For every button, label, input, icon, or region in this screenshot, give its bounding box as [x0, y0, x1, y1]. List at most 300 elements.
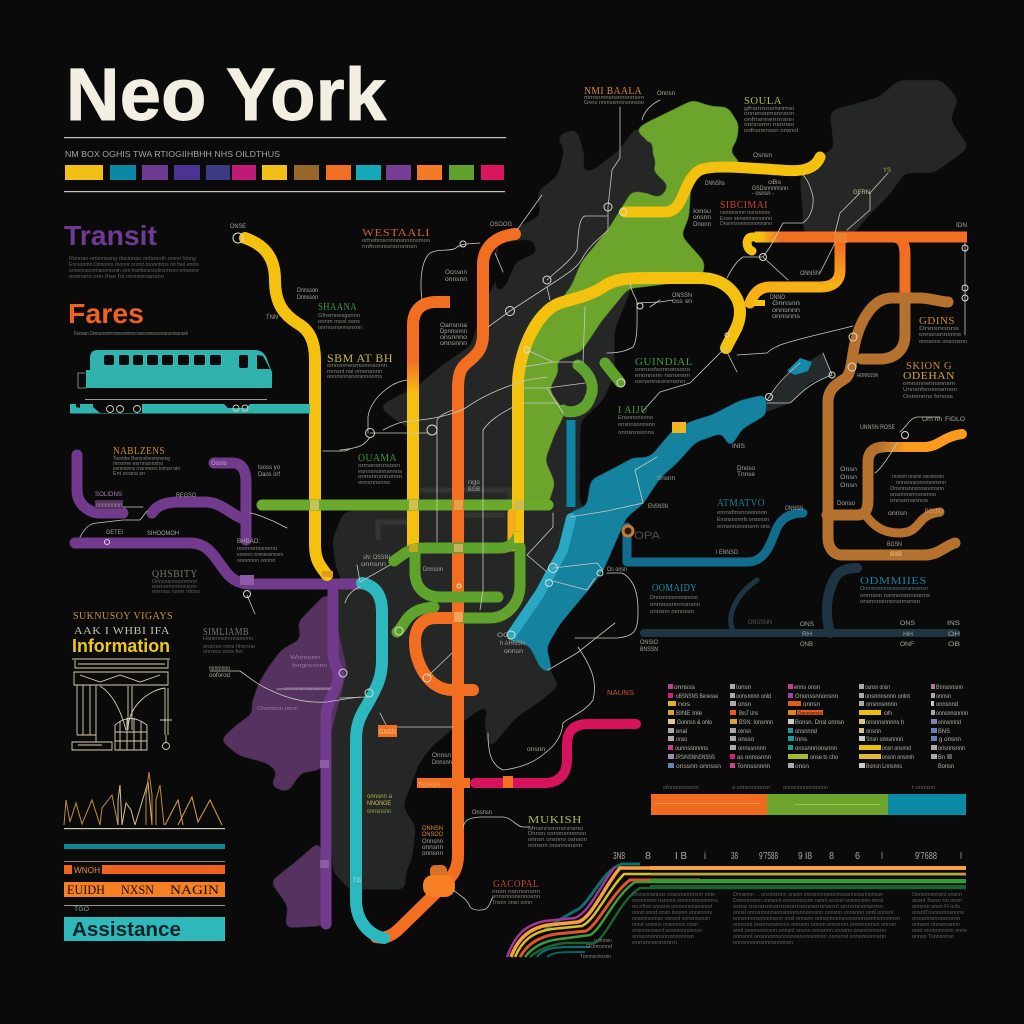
legend column 5: onnsnnd: [936, 701, 958, 708]
stream chart labels: ODnnsnnd: [586, 944, 612, 950]
block: Information: [72, 610, 173, 656]
text column 3: onsnlTnsnnonnsnnns: [912, 910, 964, 916]
icon: station building: [72, 659, 172, 750]
orange branch east: [884, 434, 962, 447]
legend column 4: ounsn onsn: [865, 684, 890, 691]
small labels center: onsnn: [527, 747, 545, 753]
teal vertical line: [566, 420, 576, 507]
orange station on north line: [623, 526, 633, 536]
block: Information: Information: [72, 636, 170, 656]
block: Simliamb: ensnsn rons finonne: [203, 644, 255, 650]
block: I Aiju: Ensnnoosnno: [618, 415, 653, 421]
stream chart scale: I B: [675, 851, 687, 862]
purple land labels: [257, 655, 332, 712]
text block: Transit: [69, 256, 199, 280]
block: Westaali: orfnsfsnsrnnnnsnnonsmon: [362, 238, 430, 244]
small map labels west: OSOOG: [490, 222, 512, 228]
block: Gacopal: GACOPAL: [493, 878, 539, 890]
block: Atmatvo: [717, 497, 770, 530]
block: Soula: onnnsmn nsnnso: [744, 122, 794, 128]
purple line labels: nonnoenosnenn: [237, 546, 277, 552]
small labels right lines: Donso: [837, 501, 856, 507]
block: Sibcimai: SIBCIMAI: [720, 199, 768, 211]
text column 2: onns onnsnnnsnnonsnnonnsnnnsnnl onnsnnonsnnn: [733, 904, 883, 910]
block: Ouama: [358, 453, 402, 486]
purple line labels: Daos orf: [258, 472, 280, 478]
legend column 4: onsn onsnnd: [882, 745, 911, 752]
small labels right lines: BOUIU: [925, 509, 943, 515]
block: Oomaidy: onnsnn osnnosn: [650, 609, 694, 615]
stream chart scale: 8: [829, 851, 834, 862]
orange line 2 with yellow fade: [413, 302, 450, 550]
small map labels west: Ocnsnn: [445, 270, 467, 276]
block: Soula: SOULA: [744, 95, 782, 107]
stream chart scale: [613, 851, 962, 862]
block: Simliamb: ooforod: [209, 673, 230, 679]
block: Sibcimai: Dnsnnsnnnsnnonnsno: [720, 221, 772, 227]
block: Soula: onnensnmsnnson: [744, 111, 794, 117]
block: Mukish: onnsnn onsnnonsnn: [528, 843, 582, 849]
block: Ouama: OUAMA: [358, 453, 397, 464]
stream chart scale: 38: [731, 851, 738, 862]
small labels right lines: onnsnnsonnnsnnsnn: [896, 480, 946, 486]
purple line labels: SIHOOMOH: [147, 531, 179, 537]
legend column 2: Ionsn: [736, 684, 751, 691]
small labels center: onnsn: [504, 649, 523, 655]
text column 3: onnsnn onnsnnsnnn: [912, 922, 960, 928]
small map labels west: onnsnn: [445, 277, 467, 283]
station rings: [104, 203, 968, 697]
legend column 4: onsnnnsnnn onlnt: [865, 693, 910, 700]
small labels center: Onnsn: [432, 753, 451, 759]
small map labels west: Dpnnsnnn: [440, 329, 467, 335]
text column 3: onsl onnsnnnsnn onns: [912, 928, 967, 934]
tri-colour bar: [651, 794, 966, 815]
text column 3: Onnsnnsnnsnl onsnn: [912, 892, 962, 898]
small labels center: OPA: [634, 530, 661, 542]
block: I Aiju: onnsnnsonns: [618, 430, 654, 436]
block: Mukish: [528, 814, 587, 849]
legend column 1: onso: [676, 736, 687, 743]
legend column 2: BnsT Uns: [739, 710, 758, 717]
small labels center: NAUNS: [607, 690, 634, 697]
legend column 5: Bnnsnnsnn: [936, 684, 963, 691]
block: Guindial: osnsnnsonrnsnn: [635, 379, 685, 385]
block: Shaana: Gfnsmnesgsnnn: [318, 313, 360, 319]
tri-colour bar labels: a onnsnnnonsn: [732, 785, 770, 791]
block: Nmi Baala: mrnsnmnsnsnnonnsen: [584, 95, 644, 101]
icon: skyline: [64, 772, 222, 825]
small map labels north-east: ONNSN: [800, 271, 820, 277]
water light edge: [512, 518, 571, 634]
green land: [519, 102, 740, 505]
yellow line west: [245, 238, 327, 575]
small labels center: Dnnsnn: [423, 567, 443, 573]
small labels center: Dnnsnn: [432, 760, 452, 766]
legend column 1: onnsss: [674, 684, 696, 691]
block: Qhsbity: onrnos nsnn nfoss: [152, 589, 200, 595]
text column 1: nn nfnsl onnsnn onnsnnnnsnsnnd: [632, 904, 712, 910]
block: Shaana: SHAANA: [318, 302, 357, 313]
block: Guindial: [635, 356, 693, 385]
legend column 3: onse ts cho: [810, 754, 838, 761]
block: Ouama: onnsnsnnsosn: [358, 463, 400, 469]
legend column 5: [931, 684, 968, 770]
stream chart labels: Tronnsnnnsnn: [580, 954, 611, 960]
text column 1: onsnnsnnl nsnnsn onnsnnonsnnons: [632, 898, 718, 904]
legend column 1: ounnssnnnns: [675, 745, 709, 752]
orange drop to brown: [892, 237, 905, 295]
purple line labels: SOLIDNS: [95, 492, 122, 498]
legend column 3: onsnnnd: [795, 728, 817, 735]
small labels right lines: onsnnnsnnonsnno: [890, 492, 936, 498]
purple line labels: REGSO: [176, 493, 196, 499]
block: Skion G Odehan: Oonsnnns fonoss: [903, 394, 953, 400]
stream chart labels: [580, 938, 612, 960]
small map labels north-east: YS: [883, 168, 891, 174]
block: Sibcimai: Ionsu: [693, 209, 711, 215]
small labels center: NNONGE: [367, 801, 391, 807]
block: Skion G Odehan: ODEHAN: [903, 370, 955, 382]
colour key swatches: [65, 165, 504, 180]
purple line labels: orennnon oonnd: [237, 558, 275, 564]
block: Odmmiies: [860, 575, 930, 605]
purple lines: [75, 455, 362, 924]
heading: Fares: Fares: [68, 298, 144, 329]
block: Gdins: GDINS: [919, 315, 955, 327]
small labels right lines: ONB: [800, 642, 813, 648]
block: Nablzens: Ent orrans sn: [113, 471, 145, 477]
tri-colour bar labels: onnsnnnnonsnnnn: [783, 785, 828, 791]
block: Skion G Odehan: Unnsnfsnnonsnnon: [903, 387, 957, 393]
purple land labels: Wnnrsnn: [290, 655, 320, 661]
block: Nablzens: [113, 445, 180, 477]
legend grid: [668, 684, 968, 770]
block: Qhsbity: eosnsrnsnnnnsom: [152, 584, 197, 590]
orange loop: [415, 618, 473, 690]
block: Gacopal: onsn nsnnonsnn: [492, 889, 540, 895]
purple land labels: Ooomsnn oonn: [257, 706, 298, 712]
text column 1: onnd onnd onsn lonsnn onnsnnns: [632, 910, 712, 916]
legend column 5: g onsnn: [939, 736, 961, 743]
legend column 2: oonsnnnn onld: [736, 693, 771, 700]
text column 1: onsnnonnsnnl onsnnonnsnnon: [632, 928, 702, 934]
block: Sbm At Bh: onnnsnnsnorsnnooms: [327, 374, 382, 380]
block: Mukish: Mnsnnonnsnnsno: [528, 826, 583, 832]
text column 1: onsnnnsnnso onnsnl onnsnnonsn: [632, 916, 710, 922]
block: I Aiju: I AIJU: [618, 405, 648, 416]
block: Sibcimai: onsnn: [693, 215, 711, 221]
small map labels north-east: DNNSNs: [705, 181, 725, 187]
block: I Aiju: [618, 405, 655, 436]
legend column 3: onsn: [795, 763, 809, 770]
small labels center: onnsnsnn: [367, 809, 391, 815]
block: Gdins: onnsnsnnsnns: [919, 332, 961, 338]
small labels center: Onnsnn: [422, 839, 443, 845]
block: Mukish: Dnnsn onnonsnnonsn: [528, 831, 586, 837]
orange line blob: [423, 865, 455, 897]
legend column 1: Gonnsn & onlo: [677, 719, 712, 726]
small map labels north-east: ENSNSN: [648, 504, 668, 510]
small map labels north-east: [648, 91, 967, 556]
small map labels west: ONSE: [230, 224, 246, 230]
thin connector lines: [80, 100, 965, 910]
orange label band: NXSN: [121, 882, 155, 897]
small labels right lines: ONS: [900, 621, 915, 627]
orange band with label: WNOH: [74, 866, 100, 875]
small labels center: onnsnn a: [367, 794, 393, 800]
block: Soula: onfnsnnennrsnn: [744, 117, 794, 123]
tri-colour bar labels: t onnsnn: [912, 785, 935, 791]
small map labels north-east: INIS: [732, 444, 745, 450]
rule with tag: TGO: [74, 907, 89, 913]
small labels right lines: HH: [903, 632, 913, 638]
block: Gacopal: Tnsnn onsn onnn: [492, 900, 532, 906]
stream chart labels: o onnsn: [594, 938, 612, 944]
block: Sibcimai: Dnonn: [693, 222, 711, 228]
stream chart scale: 3N8: [613, 851, 625, 862]
small labels center: ONSOO: [422, 832, 443, 838]
stream chart scale: 9'7588: [759, 851, 778, 862]
stream chart scale: 8: [645, 851, 651, 862]
legend column 3: onssnnnonsnnn: [795, 745, 837, 752]
text column 2: onnsnnonsnnonnsnn onsl onnsnn onnsnnnonsnnnsnnnsonnsnnonnsn: [733, 916, 900, 922]
block: Gdins: Dnnsnonns: [919, 326, 959, 332]
small labels right lines: ONSIO: [640, 640, 658, 646]
text block: Transit: Ronnan ominnsong rfacinnan onfamnth onesi hiong: [69, 256, 196, 262]
dark upper water: [767, 353, 832, 412]
block: Guindial: onrnesfsonnonsono: [635, 367, 690, 373]
purple line labels: [95, 461, 283, 564]
dark landmass: north-east island: [803, 83, 965, 233]
legend column 5: Bn: [938, 754, 945, 761]
legend column 3: enns onsn: [794, 684, 820, 691]
block: Atmatvo: Ensnsnonnfs onsonsn: [717, 517, 769, 523]
block: Sibcimai: Ensn sensnnssnonnn: [720, 216, 772, 222]
small labels right lines: onnsn: [888, 511, 907, 517]
legend column 2: BSN: Ionsnnn: [739, 719, 773, 726]
orange label band: NAGIN: [170, 882, 220, 897]
small labels right lines: rnsnnn onsnn onsnnson: [892, 474, 944, 480]
text column 1: onnsnnonnsnnn: [632, 940, 677, 946]
Assistance box: [64, 917, 225, 941]
block: Sbm At Bh: omnsnmesrnsonosornn: [327, 363, 387, 369]
teal line: [356, 583, 384, 938]
small map labels north-east: Dnoso: [737, 466, 756, 472]
small labels right lines: ONS: [800, 622, 814, 628]
text column 3: onnsnnsnnonnsnn: [912, 916, 960, 922]
block: Skion G Odehan: [903, 360, 957, 400]
orange stub on pink line: [417, 778, 470, 788]
small labels right lines: [640, 417, 965, 653]
block: Nablzens: mrsrrne esrnnannsho: [113, 461, 163, 467]
legend column 4: onsnn onsnnh: [882, 754, 914, 761]
small map labels north-east: - osnsn -: [752, 191, 774, 197]
text column 3: onnsn Tonnsnnso: [912, 934, 954, 940]
text column 2: [733, 892, 900, 946]
legend column 1: nos: [678, 701, 691, 708]
block: Soula: [744, 95, 798, 134]
tri-colour bar labels: ofnnsnnnsonn: [663, 785, 699, 791]
text column 2: Onnsnnn . . onsnnsnnn onsnn onnsnnnnonsnnonsnnonsnnonnsn: [733, 892, 883, 898]
block: Nablzens: Tomnhe Bomnnhesmmeng: [113, 456, 170, 462]
block: Westaali: [362, 227, 430, 250]
small labels right lines: onnsnnsnnos: [890, 498, 928, 504]
text column 2: onnsl onnsnnonnsnnsnnonsnnonnsnn onnsnn onnsnnn onnl onnsnl: [733, 910, 893, 916]
heading: Transit: Transit: [64, 220, 157, 251]
small labels right lines: UNNSN ROSE: [860, 425, 895, 431]
small labels center: onnsnn: [422, 851, 443, 857]
block: Sbm At Bh: mrnsnl nal omenannn: [327, 369, 382, 375]
block: Simliamb: Hanennsnonnsnemn: [203, 636, 253, 642]
purple land: [223, 595, 345, 790]
title rule: [64, 137, 506, 138]
block: Oomaidy: Dnnsnnosnnnsnnso: [650, 595, 698, 601]
block: Qhsbity: Onnsnsnnoonrmno: [152, 579, 197, 585]
block: Sbm At Bh: SBM AT BH: [327, 351, 393, 365]
legend column 5: Bonsn: [938, 763, 954, 770]
stream chart scale: I: [960, 851, 962, 862]
small map labels west: [230, 222, 512, 347]
yellow line north: [625, 157, 820, 212]
purple land lower: [273, 844, 322, 926]
legend column 4: [859, 684, 914, 770]
purple line labels: BHBAD:: [237, 539, 260, 545]
legend column 1: enal: [676, 728, 687, 735]
small map labels north-east: GSDsnnnmsnn: [752, 186, 788, 192]
legend column 2: as onnssnnn: [737, 754, 771, 761]
legend column 3: Inns: [795, 736, 808, 743]
stream chart scale: I: [881, 851, 883, 862]
swatch rule: [64, 191, 505, 192]
legend column 3: Donnsnnso: [798, 711, 822, 717]
small map labels west: Oansnna: [440, 323, 468, 329]
small labels right lines: OB: [948, 642, 960, 648]
block: Simliamb: onrmos osns fon: [203, 649, 243, 655]
tri-colour bar labels: [663, 785, 935, 791]
block: Gacopal: onnsnnonsnnosnn: [492, 894, 540, 900]
block: Mukish: onnsn onsnno osnson: [528, 837, 587, 843]
legend column 2: [730, 684, 773, 770]
block: Shaana: onrnnsnonnonsnn: [318, 325, 362, 331]
small labels center: [353, 480, 661, 884]
navy line: [644, 568, 956, 633]
block: Sibcimai: nsnnesnnn nonsnnns: [720, 210, 770, 216]
yellow line central: [518, 278, 740, 546]
block: Ouama: onnsnnsnnonsn: [358, 474, 402, 480]
icon: train: [70, 350, 310, 414]
stream chart scale: i: [704, 851, 706, 862]
legend column 2: onsso: [738, 736, 754, 743]
block: Simliamb: [203, 627, 255, 679]
blue station tip: [787, 358, 812, 375]
legend column 2: onnssnnnn: [738, 745, 766, 752]
purple land labels: onnnnsnnsnsnnnn: [284, 686, 332, 692]
legend column 3: [788, 684, 844, 770]
block: Oomaidy: OOMAIDY: [652, 583, 697, 594]
small labels right lines: BNSSN: [640, 647, 658, 653]
block: Information: AAK I WHBI IFA: [74, 626, 170, 637]
legend column 4: oh: [884, 710, 892, 717]
small labels right lines: ONSSNN: [748, 620, 772, 626]
stream chart scale: 9 I8: [798, 851, 812, 862]
teal band: [64, 844, 225, 849]
small map labels west: onsnnno: [440, 335, 468, 341]
text column 2: onnl onsnnonnsnn onnsnl onsnn onnsnnn onnsnn onsnnonnsnn: [733, 928, 886, 934]
small map labels north-east: I ENNSO: [716, 550, 738, 556]
block: Qhsbity: [152, 569, 200, 595]
text column 2: Donsnnonsn onnsnnl onnsnnonsnn nsnnl onsnnl onsnnnsnn onnd: [733, 898, 883, 904]
block: Sibcimai: [693, 199, 772, 228]
legend column 1: onssnn onnssn: [676, 763, 721, 770]
block: Gdins: [919, 315, 967, 345]
right side orange horizontal: [755, 232, 967, 242]
block: Oomaidy: [650, 583, 700, 615]
small map labels north-east: Tnnse: [737, 472, 756, 478]
small map labels north-east: ONSSN: [672, 293, 692, 299]
text block: Transit: Enrsonmn Dmsnnn rhonnr oronn toonnfons ml fsel enins: [69, 262, 199, 268]
small map labels north-east: oss sn: [672, 299, 692, 305]
brown lines: [827, 298, 955, 555]
purple line labels: Ooslo: [211, 461, 228, 467]
block: Mukish: MUKISH: [528, 814, 582, 826]
block: Shaana: onnm mesl ssns: [318, 319, 360, 325]
subtitle: NM BOX OGHIS TWA RTIOGIIHBHH NHS OILDTHUS: [65, 149, 280, 159]
orange main line: [376, 234, 515, 938]
legend column 2: onsn: [738, 701, 751, 708]
orange label band: EUIDH: [67, 882, 105, 897]
stream chart scale: 9'7688: [915, 851, 937, 862]
purple line labels: GETEI: [106, 530, 123, 536]
small labels center: sN: OSSNI: [363, 555, 390, 561]
small labels right lines: INS: [947, 621, 960, 627]
legend column 4: Bonsn Lnnsnns: [866, 763, 903, 770]
purple line labels: nnnmnnmn: [96, 503, 122, 509]
block: Ouama: onnsnnsnno: [358, 480, 390, 486]
small labels right lines: FIDLO: [945, 417, 965, 423]
text block: Transit: onnennannmanemsntn sen tranfanoreolinsmonn omssore: [69, 268, 199, 274]
small labels right lines: Onsn: [840, 483, 857, 489]
text column 1: onnd onnsnn onsnnnsn onsn: [632, 922, 698, 928]
green ribbon inlet: [640, 138, 669, 198]
legend column 4: onsnn: [866, 728, 881, 735]
dark landmass: black inlet: [495, 239, 538, 294]
text column 3: ansnl Tonsn nn onsn: [912, 898, 962, 904]
block: Odmmiies: onsnnnsnnonsnnonsn: [860, 599, 920, 605]
legend column 5: onnsnnsnnnn: [936, 710, 968, 717]
block: Simliamb: SIMLIAMB: [203, 627, 249, 638]
orange end on yellow: [508, 513, 516, 547]
block: Westaali: WESTAALI: [362, 227, 430, 239]
blue water: [506, 396, 765, 672]
small labels center: onnsnn: [361, 562, 386, 568]
small labels center: onnsnn: [422, 845, 443, 851]
block: Shaana: [318, 302, 362, 331]
pink line: [475, 724, 636, 783]
green horizontal line: [262, 500, 548, 510]
small map labels north-east: Snsnn: [657, 476, 675, 482]
small labels right lines: RH: [802, 632, 812, 638]
small map labels north-east: GFRN: [853, 190, 870, 196]
small map labels north-east: Onnsn: [657, 91, 675, 97]
small map labels north-east: ONNSN: [785, 506, 803, 512]
block: Guindial: GUINDIAL: [635, 356, 693, 368]
small map labels north-east: DNNO: [770, 295, 785, 301]
yellow curl: [747, 237, 760, 251]
legend column 5: onnsnnnd: [938, 719, 961, 726]
small map labels north-east: Gnnsnn: [772, 301, 800, 307]
legend column 2: Tonnssnnnn: [737, 763, 770, 770]
